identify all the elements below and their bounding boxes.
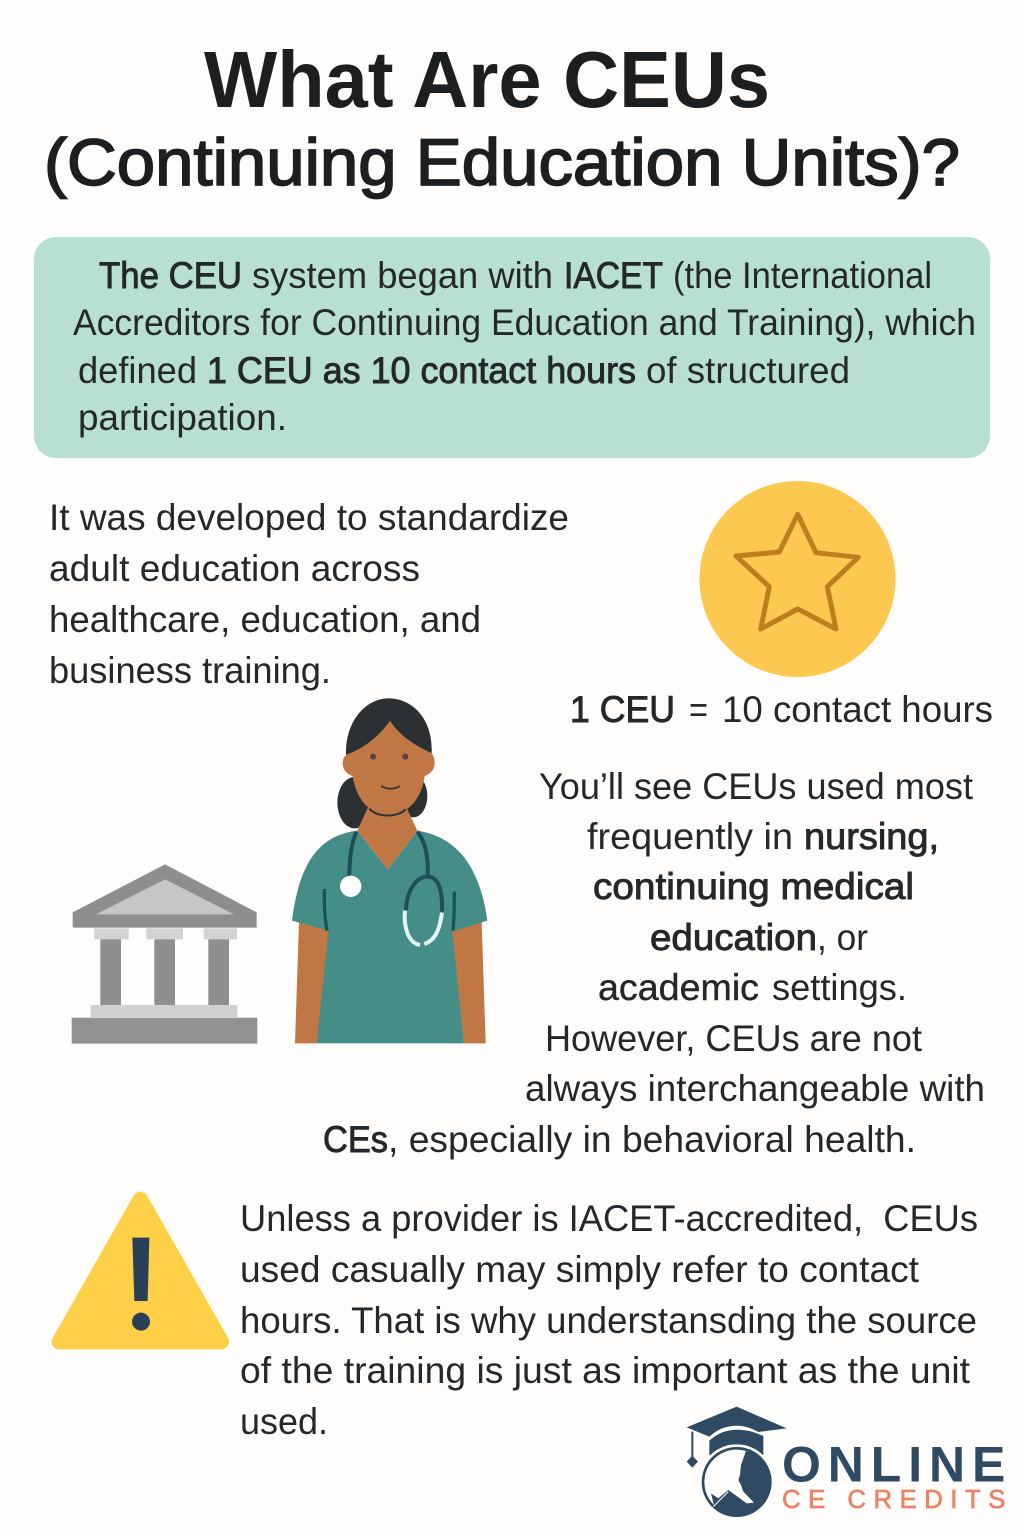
text block: where CEUs are used: academic: [598, 967, 759, 1008]
text block: where CEUs are used: However, CEUs are not: [545, 1018, 923, 1059]
wordmark: ONLINE: [782, 1437, 1005, 1493]
logo mark: graduation cap and head: [687, 1407, 787, 1520]
text block: caution about IACET accreditation: used.: [240, 1401, 328, 1442]
text block: caution about IACET accreditation: [240, 1198, 978, 1442]
equation: 1 CEU = 10 contact hours: [570, 689, 993, 730]
definition text: defined: [78, 350, 197, 391]
hair bun: [337, 775, 427, 828]
logo: Online CE Credits: [687, 1407, 1005, 1520]
text block: where CEUs are used: frequently in: [587, 816, 793, 857]
text block: purpose of CEUs: business training.: [49, 650, 331, 691]
scrubs: [292, 831, 487, 1043]
text block: where CEUs are used: always interchangeable with: [525, 1068, 985, 1109]
title: What Are CEUs: [204, 35, 770, 124]
definition text: Accreditors for Continuing Education and Training), which: [73, 302, 976, 343]
definition text: The CEU: [99, 255, 242, 296]
text block: purpose of CEUs: It was developed to standardize: [49, 497, 569, 538]
equation: 1 CEU = 10 contact hours: =: [689, 689, 708, 730]
text block: caution about IACET accreditation: hours. That is why understansding the source: [240, 1300, 977, 1341]
text block: purpose of CEUs: [49, 497, 569, 691]
definition text: system began with: [252, 255, 553, 296]
equation: 1 CEU = 10 contact hours: 10 contact hours: [722, 689, 993, 730]
arms: [295, 922, 486, 1043]
hair: [346, 698, 432, 755]
text block: where CEUs are used: , especially in behavioral health.: [388, 1119, 916, 1160]
text block: where CEUs are used: settings.: [772, 967, 907, 1008]
stethoscope: [324, 832, 454, 945]
panel: CEU definition: [34, 237, 990, 458]
tagline: CE CREDITS: [782, 1486, 1005, 1514]
text block: where CEUs are used: [323, 766, 985, 1160]
neck: [357, 807, 417, 869]
text block: caution about IACET accreditation: Unless a provider is IACET-accredited, CEUs: [240, 1198, 978, 1239]
definition text: (the International: [673, 255, 932, 296]
title: (Continuing Education Units)?: [44, 125, 960, 199]
definition text: of structured: [646, 350, 850, 391]
text block: where CEUs are used: , or: [817, 917, 868, 958]
text block: where CEUs are used: You’ll see CEUs used most: [539, 766, 974, 807]
definition text: [73, 255, 976, 438]
text block: purpose of CEUs: healthcare, education, and: [49, 599, 481, 640]
title: [44, 35, 960, 199]
text block: purpose of CEUs: adult education across: [49, 548, 420, 589]
equation: 1 CEU = 10 contact hours: 1 CEU: [570, 689, 675, 730]
icon: warning triangle: [59, 1199, 221, 1342]
definition text: IACET: [564, 255, 663, 296]
text block: caution about IACET accreditation: of the training is just as important as the unit: [240, 1350, 971, 1391]
face: [343, 721, 435, 815]
text block: where CEUs are used: continuing medical: [593, 866, 914, 907]
icon: star coin: [700, 481, 896, 677]
definition text: participation.: [78, 397, 287, 438]
text block: where CEUs are used: CEs: [323, 1119, 388, 1160]
text block: where CEUs are used: education: [650, 917, 817, 958]
text block: where CEUs are used: nursing,: [804, 816, 939, 857]
icon: nurse with stethoscope: [292, 698, 487, 1043]
definition text: 1 CEU as 10 contact hours: [207, 350, 636, 391]
icon: institution building: [72, 864, 257, 1044]
text block: caution about IACET accreditation: used casually may simply refer to contact: [240, 1249, 920, 1290]
